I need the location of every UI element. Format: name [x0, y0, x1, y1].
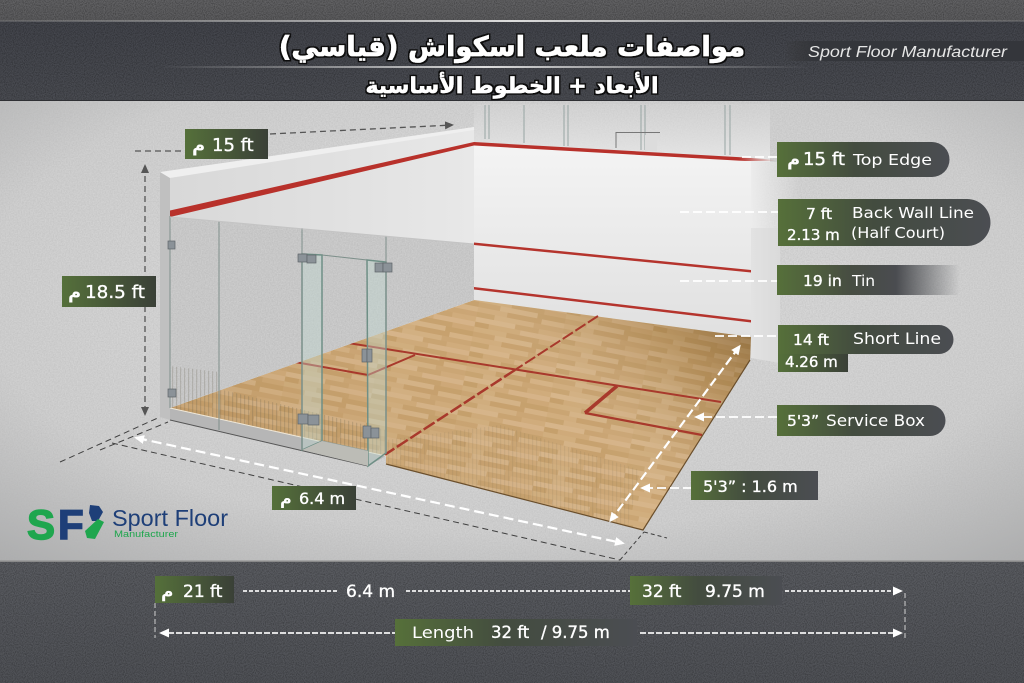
footer label: 32 ft — [630, 576, 782, 605]
hardware — [168, 241, 392, 438]
footer label: 21 ft — [155, 576, 234, 603]
right side wall return — [751, 160, 800, 363]
height arrow — [144, 166, 146, 414]
label: 18.5 ft height: 18.5 ft — [85, 282, 145, 303]
logo: S — [27, 501, 55, 548]
footer text: 6.4 m: 6.4 m — [346, 582, 395, 602]
icon: player — [85, 505, 104, 539]
footer band — [0, 560, 1024, 683]
floor width arrow — [137, 438, 622, 543]
label: 6.4 m width — [272, 486, 356, 510]
footer label: 21 ft: م — [161, 582, 173, 602]
footer label: length — [395, 619, 637, 646]
label: 18.5 ft height: م — [68, 282, 81, 303]
header band — [0, 0, 1024, 102]
callout: top edge: م — [787, 149, 800, 170]
left side wall — [160, 127, 474, 420]
label: 15 ft top: 15 ft — [212, 135, 254, 156]
callout: tin — [777, 265, 960, 295]
label: 18.5 ft height — [62, 276, 156, 307]
callout: service box: 5'3” — [787, 412, 819, 430]
floor red lines — [295, 316, 721, 456]
main title: مواصفات ملعب اسكواش (قياسي) — [279, 31, 745, 63]
logo: Manufacturer — [114, 529, 178, 539]
callout: top edge — [777, 142, 950, 177]
callout: top edge: 15 ft — [803, 149, 845, 170]
logo: F — [58, 501, 84, 548]
brand tag — [785, 41, 1024, 61]
callout: short line: Short Line — [853, 329, 941, 348]
callout: back wall line: Back Wall Line — [852, 204, 974, 222]
ground dimension guides — [60, 417, 667, 560]
callout: 1.6 m: 5'3” : 1.6 m — [703, 477, 798, 496]
callout: back wall line: 2.13 m — [787, 226, 840, 244]
callout: 1.6 m — [691, 471, 818, 500]
pillar — [160, 172, 170, 420]
callout: short line: 4.26 m — [785, 353, 838, 371]
label: 15 ft top — [185, 129, 268, 159]
callout: short line: 14 ft — [793, 331, 829, 349]
footer label: 32 ft: 9.75 m — [705, 582, 765, 602]
top width guide arrow — [135, 125, 452, 151]
callout: short line — [778, 325, 954, 372]
leader lines — [643, 157, 778, 488]
subtitle: الأبعاد + الخطوط الأساسية — [365, 71, 659, 99]
footer label: 32 ft: 32 ft — [642, 582, 682, 602]
wood floor — [170, 300, 751, 530]
footer label: length: / 9.75 m — [541, 623, 610, 642]
red top edge on side wall — [170, 142, 474, 217]
callout: back wall line: 7 ft — [806, 205, 832, 223]
red top edge line — [474, 142, 775, 161]
callout: tin: 19 in — [803, 272, 842, 290]
brand tag: Sport Floor Manufacturer — [808, 44, 1008, 61]
floor length arrow — [611, 347, 739, 520]
callout: back wall line: (Half Court) — [851, 224, 945, 242]
callout: service box — [777, 405, 946, 436]
label: 15 ft top: م — [192, 135, 205, 156]
half court line on back wall — [474, 242, 751, 272]
sill — [170, 408, 386, 466]
footer label: 21 ft: 21 ft — [183, 582, 223, 602]
tin line on back wall — [474, 287, 751, 322]
label: 6.4 m width: م — [280, 489, 292, 508]
glass wall with door — [168, 216, 474, 466]
glass above back wall — [474, 104, 770, 162]
callout: back wall line — [778, 199, 990, 246]
callout: top edge: Top Edge — [852, 151, 932, 169]
logo — [27, 501, 228, 548]
footer dimension lines — [155, 591, 905, 638]
callout: tin: Tin — [851, 272, 875, 290]
back wall — [474, 142, 775, 338]
footer label: length: Length — [412, 623, 474, 642]
logo: Sport Floor — [112, 505, 228, 531]
glass mullions — [170, 216, 386, 453]
label: 6.4 m width: 6.4 m — [299, 489, 345, 508]
footer label: length: 32 ft — [491, 623, 530, 642]
door panels — [302, 254, 322, 450]
callout: service box: Service Box — [826, 411, 925, 430]
court panel background — [0, 101, 1024, 561]
